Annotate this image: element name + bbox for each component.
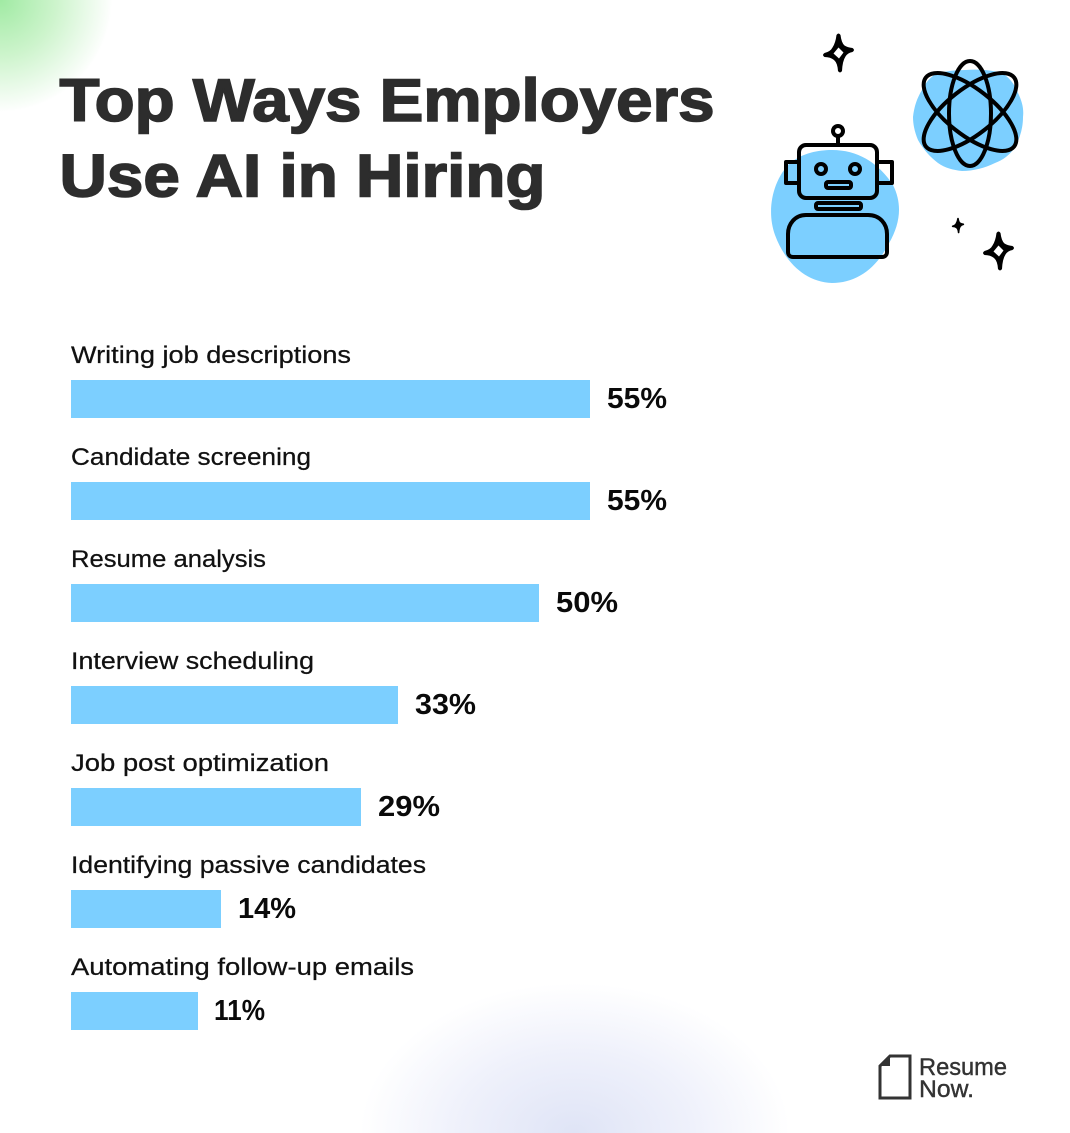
bar chart [71, 342, 667, 1030]
row: Identifying passive candidates: 14% [238, 893, 296, 925]
row: Resume analysis [71, 546, 618, 622]
row: Interview scheduling: 33% [415, 689, 476, 721]
row: Identifying passive candidates: Identifying passive candidates [71, 852, 426, 879]
icon: sparkle top [823, 34, 854, 72]
row: Resume analysis: Resume analysis [71, 546, 266, 573]
row: Candidate screening: 55% [607, 485, 667, 517]
icon: atom [912, 59, 1028, 171]
row: Candidate screening: Candidate screening [71, 444, 311, 471]
row: Resume analysis: 50% [556, 587, 618, 619]
row: Interview scheduling [71, 648, 476, 724]
row: Job post optimization: 29% [378, 791, 440, 823]
row: Writing job descriptions: Writing job descriptions [71, 342, 351, 369]
row: Writing job descriptions: 55% [607, 383, 667, 415]
row: Job post optimization [71, 750, 440, 826]
icon: robot [771, 126, 899, 283]
icon: sparkle small [952, 218, 964, 233]
title: Top Ways Employers [60, 67, 715, 134]
row: Job post optimization: Job post optimization [71, 750, 329, 777]
row: Writing job descriptions [71, 342, 667, 418]
row: Automating follow-up emails: Automating follow-up emails [71, 954, 414, 981]
row: Automating follow-up emails [71, 954, 414, 1030]
logo: Resume Now: Resume [919, 1054, 1007, 1081]
row: Automating follow-up emails: 11% [214, 995, 265, 1027]
row: Identifying passive candidates [71, 852, 426, 928]
logo: Resume Now: Now. [919, 1076, 974, 1103]
title: Use AI in Hiring [60, 142, 546, 210]
row: Interview scheduling: Interview scheduling [71, 648, 314, 675]
logo: Resume Now [879, 1054, 1007, 1103]
row: Candidate screening [71, 444, 667, 520]
title [60, 67, 715, 210]
icon: sparkle bottom right [983, 232, 1014, 270]
